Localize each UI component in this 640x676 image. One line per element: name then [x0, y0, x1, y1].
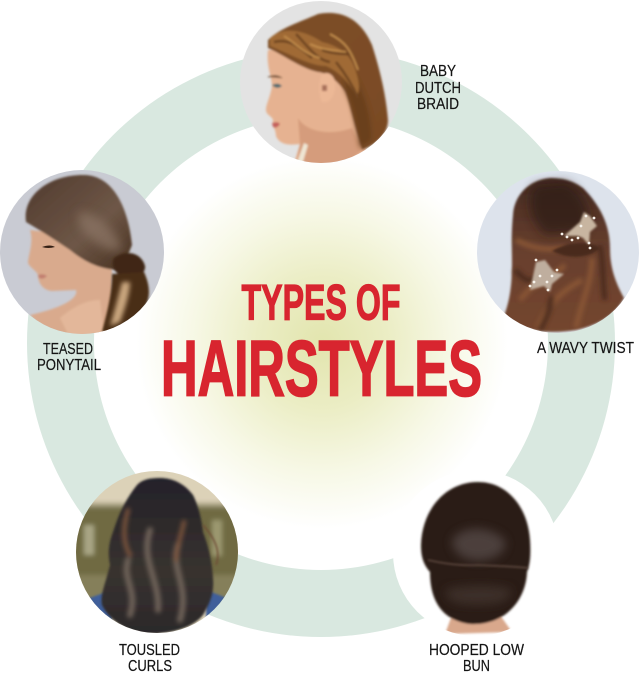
- ring: [27, 49, 615, 637]
- label: baby dutch braid: DUTCH: [415, 80, 461, 97]
- portrait: tousled curls: [76, 471, 238, 633]
- label: tousled curls: CURLS: [128, 658, 172, 675]
- label: baby dutch braid: [415, 63, 461, 113]
- portrait: hooped low bun: [393, 470, 559, 636]
- label: teased ponytail: TEASED: [43, 341, 93, 358]
- title: [161, 274, 482, 412]
- label: tousled curls: [119, 642, 180, 675]
- label: teased ponytail: [37, 341, 101, 374]
- title: TYPES OF: [242, 274, 400, 330]
- label: baby dutch braid: BABY: [420, 63, 456, 80]
- portrait: baby dutch braid: [240, 1, 402, 170]
- background glow: [136, 157, 508, 529]
- label: tousled curls: TOUSLED: [119, 642, 180, 659]
- portrait: teased ponytail: [0, 170, 164, 345]
- portrait: a wavy twist: [477, 171, 639, 333]
- label: hooped low bun: BUN: [463, 658, 490, 675]
- label: baby dutch braid: BRAID: [417, 96, 459, 113]
- label: teased ponytail: PONYTAIL: [37, 357, 101, 374]
- label: hooped low bun: [429, 642, 524, 675]
- label: hooped low bun: HOOPED LOW: [429, 642, 524, 659]
